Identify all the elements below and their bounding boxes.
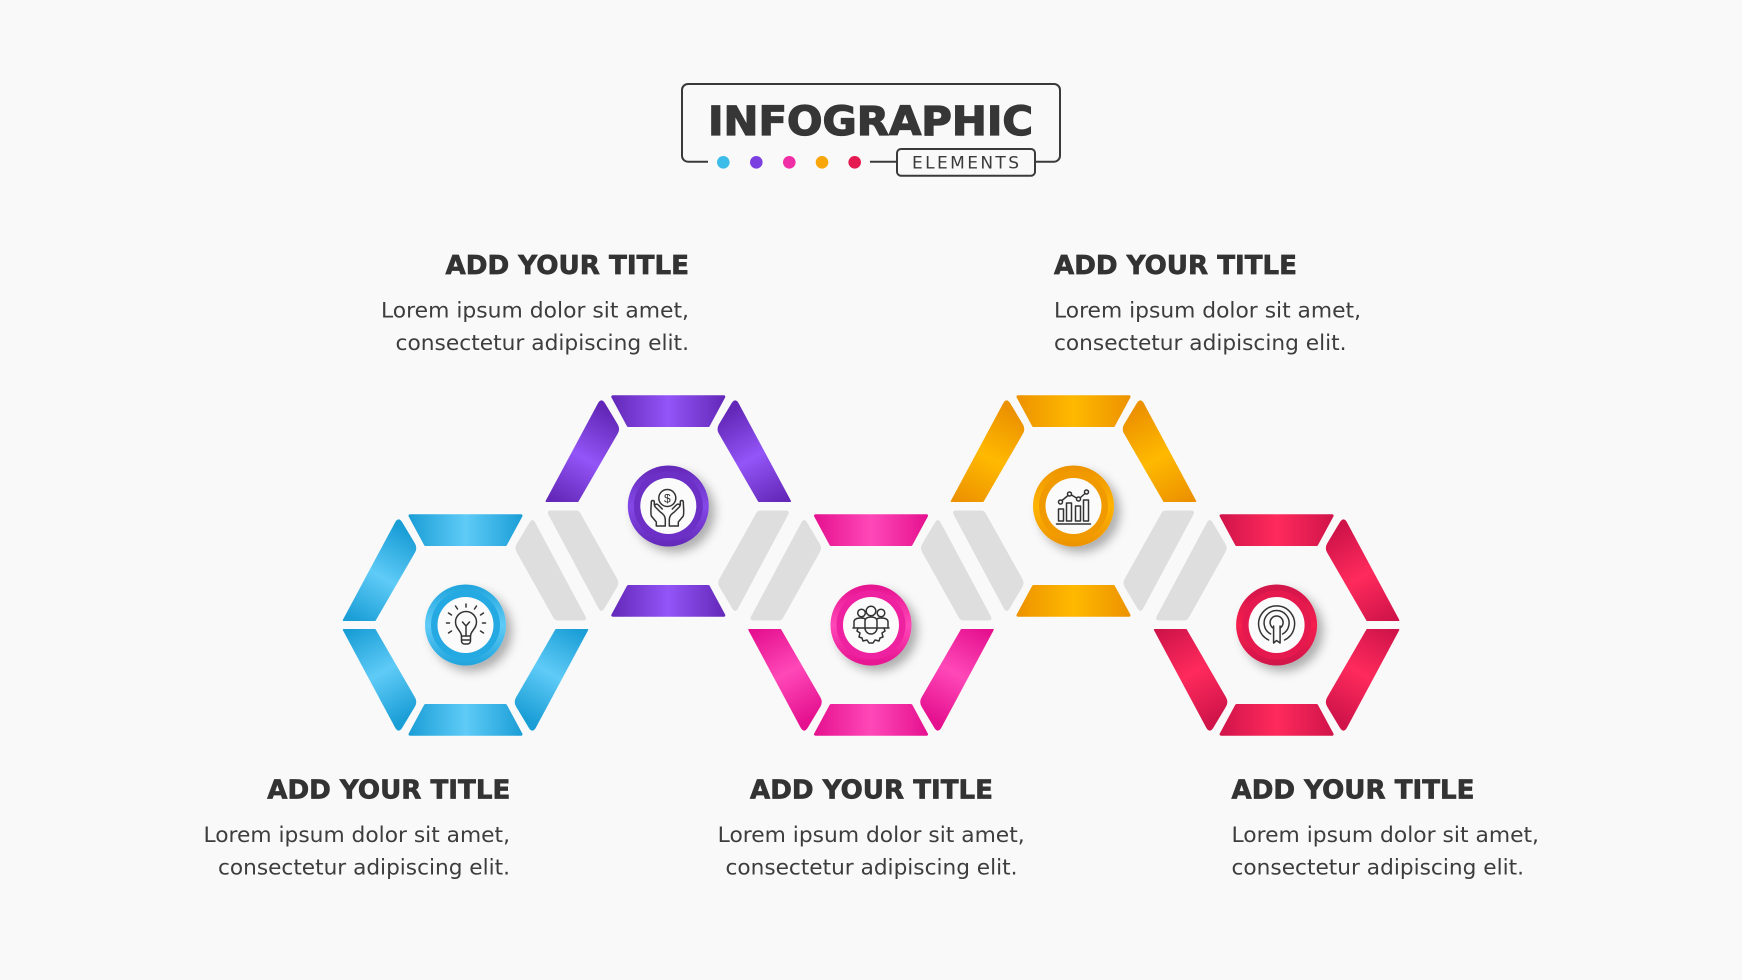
- heading: ADD YOUR TITLE: [750, 776, 993, 806]
- step 3 text: bottom-left (blue): [204, 776, 510, 881]
- segments: [344, 516, 588, 734]
- segments: [1155, 516, 1399, 734]
- body line 2: consectetur adipiscing elit.: [726, 856, 1018, 881]
- heading: ADD YOUR TITLE: [446, 251, 689, 281]
- hexagon: purple: [546, 397, 790, 615]
- icon badge: target signal: [1236, 584, 1317, 666]
- body line 2: consectetur adipiscing elit.: [1054, 331, 1346, 356]
- body line 2: consectetur adipiscing elit.: [396, 331, 689, 356]
- elements label: ELEMENTS: [912, 154, 1019, 174]
- icon badge: bar chart: [1033, 466, 1114, 546]
- icon badge: money in hands: [628, 466, 709, 546]
- icon badge: light bulb: [425, 584, 506, 666]
- step 4 text: bottom-centre (pink): [718, 776, 1025, 881]
- icon: money in hands: $: [664, 492, 671, 506]
- body line 2: consectetur adipiscing elit.: [1232, 856, 1524, 881]
- hexagon: pink: [749, 516, 993, 734]
- body line 1: Lorem ipsum dolor sit amet,: [1232, 823, 1539, 848]
- icon: target signal: [1259, 606, 1295, 643]
- segments: [546, 397, 790, 615]
- title frame: [682, 84, 1060, 162]
- hexagon: red: [1155, 516, 1399, 734]
- hexagon: blue: [344, 516, 588, 734]
- body line 1: Lorem ipsum dolor sit amet,: [1054, 299, 1361, 324]
- hexagon: orange: [952, 397, 1196, 615]
- title block: [682, 84, 1060, 176]
- segments: [749, 516, 993, 734]
- step 1 text: top-left (purple): [381, 251, 689, 356]
- heading: ADD YOUR TITLE: [267, 776, 510, 806]
- heading: ADD YOUR TITLE: [1232, 776, 1474, 806]
- segments: [952, 397, 1196, 615]
- elements label: [897, 149, 1035, 176]
- heading: ADD YOUR TITLE: [1054, 251, 1297, 281]
- body line 1: Lorem ipsum dolor sit amet,: [718, 823, 1025, 848]
- body line 1: Lorem ipsum dolor sit amet,: [381, 299, 689, 324]
- colour dots: [717, 156, 861, 169]
- title text: INFOGRAPHIC: [708, 99, 1033, 145]
- step 2 text: top-right (orange): [1054, 251, 1361, 356]
- icon: team and gear: [853, 606, 889, 643]
- body line 1: Lorem ipsum dolor sit amet,: [204, 823, 510, 848]
- step 5 text: bottom-right (red): [1232, 776, 1539, 881]
- body line 2: consectetur adipiscing elit.: [218, 856, 510, 881]
- icon: bar chart: [1056, 490, 1090, 524]
- icon: light bulb: [446, 604, 486, 644]
- icon badge: team and gear: [830, 584, 912, 666]
